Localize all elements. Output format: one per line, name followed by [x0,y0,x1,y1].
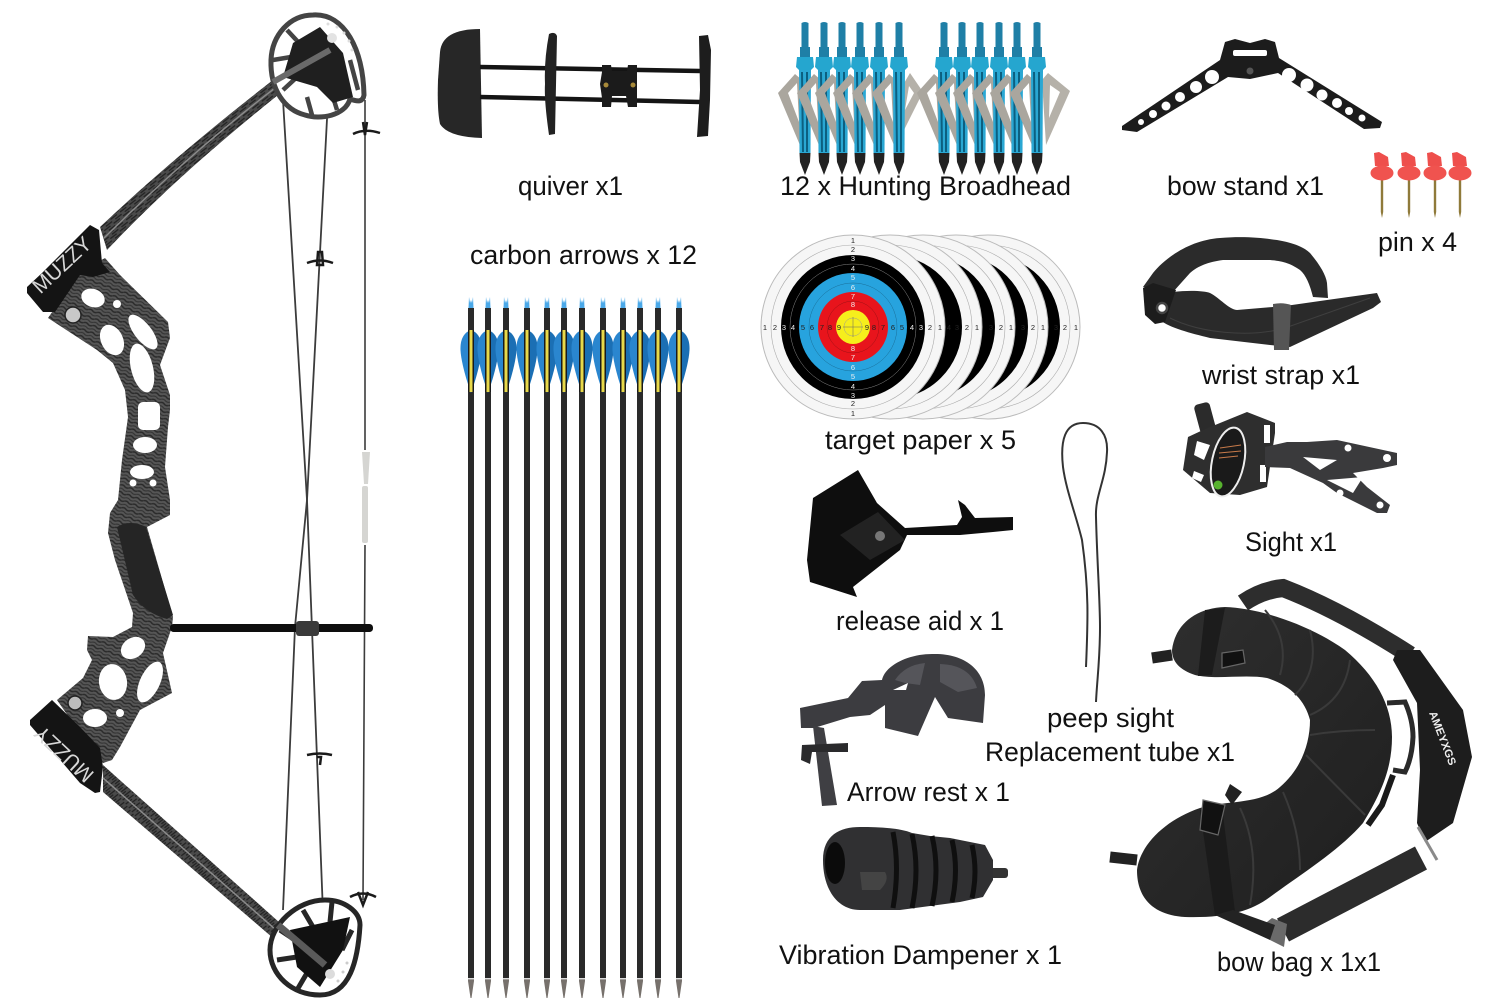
front target: 7 [820,323,824,332]
back target 3: 3 [1021,323,1025,332]
front target: 5 [851,372,855,381]
upper limb pocket: MUZZY [28,232,97,298]
grip [117,523,173,619]
back target 4: 2 [1063,323,1067,332]
front target: 5 [851,273,855,282]
back target 4: 3 [1054,323,1058,332]
back target 4 [896,235,1080,419]
hunting broadheads [778,22,1070,175]
label: vibration dampener: Vibration Dampener x 1 [779,940,1062,970]
front target: 9 [865,323,869,332]
back target 2 [831,235,1015,419]
front target: 9 [837,323,841,332]
bag body [1137,607,1393,940]
back target 1: 4 [947,323,951,332]
string stoppers [307,122,380,905]
front target: 2 [851,245,855,254]
front target [761,235,945,419]
vibration dampener [823,827,1008,910]
peep sight tube [1062,423,1107,702]
front target: 1 [938,323,942,332]
back target 1: 3 [955,323,959,332]
front target: 4 [851,264,855,273]
bow bag [1110,588,1472,947]
bag handle [1387,702,1413,772]
riser [48,258,173,763]
bow strings and cables [283,100,365,967]
label: pins: pin x 4 [1378,227,1457,257]
strap logo: AMEYXGS [1426,710,1458,767]
upper limb pocket [27,225,110,312]
arrow rest [800,654,985,806]
front target: 2 [928,323,932,332]
label: carbon arrows: carbon arrows x 12 [470,240,697,270]
label: peep sight: peep sight [1047,703,1174,733]
front target: 5 [801,323,805,332]
upper limb [100,80,278,250]
target papers [761,235,1080,419]
back target 1: 1 [975,323,979,332]
front target: 8 [851,344,855,353]
front target: 6 [810,323,814,332]
front target: 4 [791,323,795,332]
right blades [900,73,1070,145]
front target: 6 [891,323,895,332]
lower limb pocket: MUZZY [30,721,99,787]
carbon arrows [460,297,690,998]
shoulder strap [1243,588,1472,947]
front target: 2 [851,399,855,408]
lower cam [270,900,360,995]
label: sight: Sight x1 [1245,527,1337,557]
label: replacement tube: Replacement tube x1 [985,737,1235,767]
back target 1 [798,235,982,419]
string silencer [362,452,370,543]
back target 1: 2 [965,323,969,332]
label: release aid: release aid x 1 [836,606,1004,636]
lower limb pocket [30,700,103,793]
back target 3: 1 [1041,323,1045,332]
front target: 6 [851,283,855,292]
back target 3 [864,235,1048,419]
front target: 4 [910,323,914,332]
back target 2: 1 [1009,323,1013,332]
front target: 1 [851,409,855,418]
front target: 3 [919,323,923,332]
lower limb [103,765,280,938]
upper cam [271,15,364,117]
bow stand [1122,39,1382,132]
pins [1370,152,1472,218]
front target: 7 [851,292,855,301]
back target 2: 3 [989,323,993,332]
sight [1183,401,1397,513]
front target: 1 [763,323,767,332]
stabilizer rod and cable slide [170,621,373,636]
front target: 6 [851,363,855,372]
front target: 4 [851,382,855,391]
back target 3: 2 [1031,323,1035,332]
label: arrow rest: Arrow rest x 1 [847,777,1010,807]
front target: 3 [782,323,786,332]
back target 2: 2 [999,323,1003,332]
label: bow stand: bow stand x1 [1167,171,1324,201]
front target: 8 [828,323,832,332]
label: bow bag: bow bag x 1x1 [1217,947,1381,977]
front target: 3 [851,391,855,400]
back target 4: 1 [1074,323,1078,332]
front target: 8 [872,323,876,332]
bag tabs [1110,655,1172,860]
front target: 5 [900,323,904,332]
front target: 1 [851,236,855,245]
front target: 8 [851,300,855,309]
label: broadheads: 12 x Hunting Broadhead [780,171,1071,201]
compound bow [27,15,380,995]
front target: 7 [881,323,885,332]
front target: 7 [851,353,855,362]
label: quiver: quiver x1 [518,171,623,201]
quiver rods [480,67,700,102]
front target: 2 [773,323,777,332]
wrist strap [1143,237,1381,350]
label: wrist strap: wrist strap x1 [1201,360,1360,390]
quiver [438,29,711,138]
release aid [807,470,1013,597]
label: target paper: target paper x 5 [825,425,1016,455]
front target: 3 [851,254,855,263]
